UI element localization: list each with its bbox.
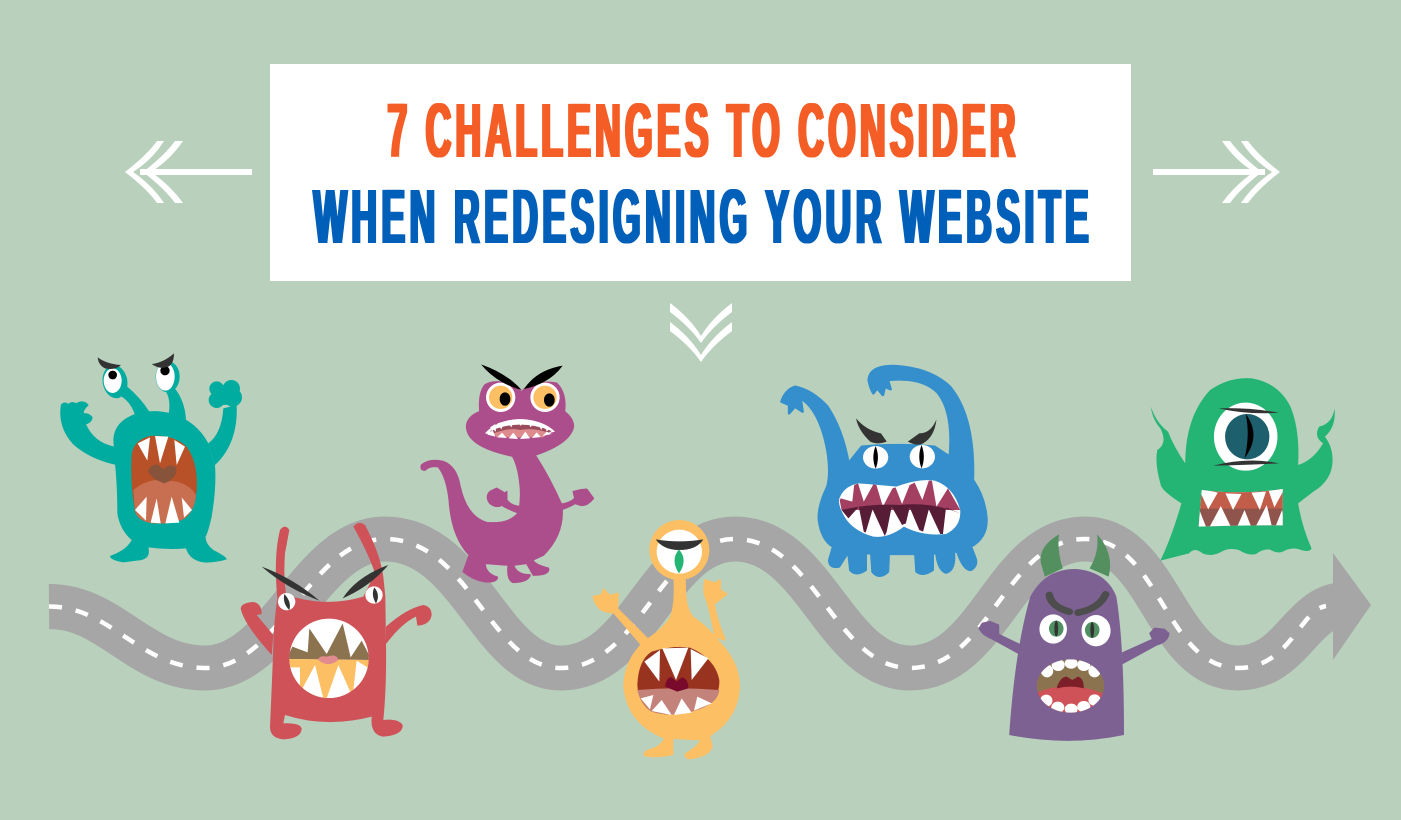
monster: teal xyxy=(61,353,242,563)
title line 1: 7 CHALLENGES TO CONSIDER xyxy=(386,88,1014,174)
monster: magenta xyxy=(421,364,593,582)
monster: blue xyxy=(781,366,986,576)
monster: red xyxy=(241,523,432,739)
monster: purple xyxy=(979,534,1169,741)
title line 2: WHEN REDESIGNING YOUR WEBSITE xyxy=(312,174,1087,260)
road xyxy=(49,539,1371,668)
arrow: left xyxy=(125,141,252,203)
road centre dashes xyxy=(49,539,1326,668)
title panel xyxy=(270,64,1131,281)
arrow: right xyxy=(1153,141,1280,203)
monster: green xyxy=(1151,378,1335,561)
arrow: down chevrons xyxy=(670,303,732,362)
monster: orange xyxy=(593,520,740,759)
road arrowhead xyxy=(1333,553,1371,660)
